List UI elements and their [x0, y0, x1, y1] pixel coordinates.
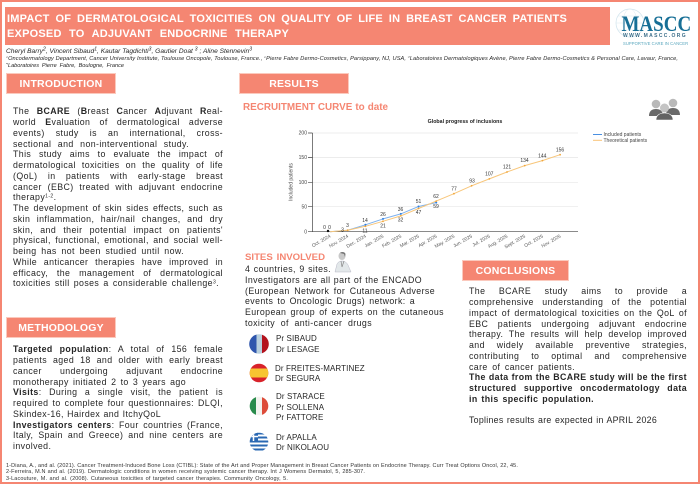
x axis month labels: Sept. 2025 [504, 233, 527, 250]
investigators: Spain [275, 364, 365, 383]
text: methodology: Investigators centers: Four countries (France, [13, 420, 223, 430]
text: introduction: sectional and non-interventional study. [13, 139, 189, 149]
text: methodology: patients aged 18 and older with early breast [13, 355, 223, 365]
data labels: 14 [362, 218, 368, 224]
data labels: 156 [556, 148, 564, 154]
text: methodology: Skindex-16, Hairdex and ItchyQoL [13, 409, 161, 419]
x axis month labels: Jul. 2025 [471, 233, 492, 248]
data labels: 134 [520, 158, 529, 164]
investigators: France: Pr SIBAUD [276, 334, 317, 343]
investigators: Spain: Dr FREITES-MARTINEZ [275, 364, 365, 372]
data labels: 62 [433, 194, 439, 200]
investigators: Italy [276, 392, 325, 422]
text: introduction: efficacy, the management of dermatological [13, 268, 223, 278]
text: conclusions: and widely available preventive strategies, [469, 340, 687, 350]
text: sites description: European group of experts on the cutaneous [245, 307, 444, 317]
text: introduction: This study aims to evaluate the impact of [13, 149, 223, 159]
x axis month labels: Jun. 2025 [452, 233, 474, 249]
heading: introduction: INTRODUCTION [20, 78, 102, 90]
y axis and grid: 50 [301, 204, 307, 210]
text: introduction: cancer (EBC) treated with adjuvant endocrine [13, 182, 223, 192]
references: 3-Lacouture, M. and al. (2008). Cutaneous toxicities of targeted cancer therapies. Community Oncology, 5. [6, 476, 288, 482]
flag: Spain [250, 364, 268, 382]
text: methodology: cancer undergoing adjuvant endocrine [13, 366, 223, 376]
x axis month labels [311, 233, 562, 250]
data labels: 36 [398, 207, 403, 213]
investigators: Greece: Dr APALLA [276, 432, 317, 442]
y axis and grid: 150 [299, 155, 307, 161]
data labels: 0 [323, 225, 326, 231]
text: methodology: monotherapy initiated 2 to 3 years ago [13, 377, 186, 387]
text: methodology: required to complete four questionnaires: DLQI, [13, 398, 223, 408]
text: methodology: Targeted population: A total of 156 female [13, 344, 223, 354]
text: introduction: The development of skin sides effects, such as [13, 203, 223, 213]
x axis month labels: Oct. 2025 [523, 233, 545, 249]
heading: conclusions: CONCLUSIONS [476, 265, 555, 277]
references: 2-Ferreira, M.N and al. (2019). Dermatologic conditions in women receiving systemic cancer therapy. Int J Womens Dermatol, 5, 285-307. [6, 469, 365, 475]
text: introduction: dermatological toxicities on the quality of life [13, 160, 223, 170]
text: conclusions: care of cancer patients. [469, 362, 575, 372]
flag: France [249, 334, 269, 354]
data labels: 11 [362, 228, 368, 234]
logo: MASCC: WWW.MASCC.ORG [623, 33, 687, 39]
text: sites description: events to Oncologic Drugs) network: a [245, 296, 415, 306]
text: conclusions: impact of dermatological toxicities on the QoL of [469, 308, 687, 318]
logo: MASCC: SUPPORTIVE CARE IN CANCER [623, 40, 688, 46]
heading: methodology [6, 317, 116, 338]
text: sites description: (European Network for Cutaneous Adverse [245, 286, 435, 296]
title banner: IMPACT OF DERMATOLOGICAL TOXICITIES ON QUALITY OF LIFE IN BREAST CANCER PATIENTS [7, 12, 567, 24]
data labels: 144 [538, 154, 547, 160]
flag: Italy [250, 397, 268, 415]
text: sites description: Investigators are all part of the ENCADO [245, 275, 422, 285]
text: introduction: skin, and their potential impact on patients' [13, 225, 223, 235]
text: conclusions: therapy. The results will help develop improved [469, 329, 687, 339]
data labels: 21 [380, 224, 386, 230]
references: 1-Diana, A., and al. (2021). Cancer Treatment-Induced Bone Loss (CTIBL): State of the Art and Proper Management in Breast Cancer Patients on Endocrine Therapy. Curr Treat Options Oncol, 22, 45. [6, 462, 518, 468]
data labels: 77 [451, 186, 457, 192]
y axis and grid: 0 [304, 229, 307, 235]
flag: Greece [250, 432, 268, 450]
text: conclusions: The data from the BCARE study will be the first [469, 372, 687, 382]
text: conclusions [469, 286, 687, 425]
heading: methodology: METHODOLOGY [18, 322, 104, 334]
text: conclusions: contributing to optimal and comprehensive [469, 351, 687, 361]
references [6, 462, 518, 482]
text: sites description [245, 264, 444, 328]
chart legend: Theoretical patients [604, 138, 648, 144]
heading: sites involved: SITES INVOLVED [245, 252, 325, 262]
investigators: France [276, 334, 320, 354]
text: introduction: (QoL) in patients with early-stage breast [13, 171, 223, 181]
chart legend [593, 132, 648, 144]
affiliations [6, 56, 678, 68]
text: conclusions: structured supportive oncodermatology data [469, 383, 687, 393]
x axis month labels: Oct. 2024 [311, 233, 332, 249]
data labels: 93 [469, 178, 475, 184]
data labels: 47 [416, 210, 421, 216]
x axis month labels: Dec. 2024 [345, 233, 368, 250]
x axis month labels: Nov. 2024 [328, 233, 350, 249]
heading: recruitment curve: RECRUITMENT CURVE to date [243, 102, 388, 112]
title banner [5, 7, 610, 45]
text: methodology: involved. [13, 441, 51, 451]
y axis and grid: Included patients [288, 163, 294, 201]
investigators: France: Dr LESAGE [276, 345, 320, 354]
text: introduction: world Evaluation of dermatological adverse [13, 117, 223, 127]
data labels: 26 [380, 212, 386, 218]
chart title: Global progress of inclusions [428, 119, 502, 125]
x axis month labels: Jan. 2025 [364, 233, 385, 249]
investigators: Italy: Pr SOLLENA [276, 403, 324, 412]
data labels [323, 148, 564, 234]
icon: doctor [334, 252, 352, 272]
data labels: 121 [503, 164, 511, 170]
text: introduction: therapy1-2. [13, 192, 56, 202]
authors: Cheryl Barry2, Vincent Sibaud1, Kautar Tagdichti3, Gautier Doat 3 ; Aline Stennevin3 [6, 46, 252, 54]
data labels: 51 [416, 199, 421, 205]
data labels: 107 [485, 172, 494, 178]
text: sites description: toxicity of anti-cancer drugs [245, 318, 372, 328]
x axis month labels: Apr. 2025 [417, 233, 438, 249]
series: theoretical patients [327, 154, 561, 232]
x axis month labels: Aug. 2025 [487, 233, 509, 250]
text: introduction: toxicities still poses a considerable challenge3. [13, 278, 219, 288]
text: introduction: While anticancer therapies have improved in [13, 257, 223, 267]
text: introduction: physical, functional, emotional, and social well- [13, 235, 223, 245]
series: included patients [330, 202, 437, 232]
logo: MASCC: MASCC [622, 12, 691, 37]
text: introduction: events) study is an international, cross- [13, 128, 223, 138]
investigators: Italy: Dr STARACE [276, 392, 325, 401]
text: introduction [13, 106, 223, 288]
investigators: Spain: Dr SEGURA [275, 374, 320, 383]
y axis and grid: 100 [299, 180, 307, 186]
text: conclusions: comprehensive understanding of the potential [469, 297, 687, 307]
data labels: 0 [328, 225, 331, 231]
chart legend: Included patients [604, 132, 642, 138]
text: methodology: Italy, Spain and Greece) and nine centers are [13, 430, 223, 440]
data labels: 3 [346, 223, 349, 229]
heading: introduction [6, 73, 116, 94]
investigators: Greece [276, 432, 329, 452]
text: conclusions: The BCARE study aims to provide a [469, 286, 687, 296]
icon: group of people [649, 98, 680, 120]
heading: conclusions [462, 260, 569, 281]
text: sites description: 4 countries, 9 sites. [245, 264, 331, 274]
text: conclusions: Toplines results are expected in APRIL 2026 [469, 415, 657, 425]
text: methodology: Visits: During a single visit, the patient is [13, 387, 223, 397]
text: introduction: The BCARE (Breast Cancer Adjuvant Real- [13, 106, 223, 116]
x axis month labels: Mar. 2025 [399, 233, 421, 249]
heading: results [239, 73, 349, 94]
y axis and grid [288, 131, 578, 235]
title banner: EXPOSED TO ADJUVANT ENDOCRINE THERAPY [7, 28, 289, 40]
text: methodology [13, 344, 223, 451]
data labels: 3 [341, 228, 344, 234]
logo: MASCC [616, 8, 691, 46]
text: introduction: being has not been studied until now. [13, 246, 184, 256]
investigators: Greece: Dr NIKOLAOU [276, 443, 329, 452]
data labels: 32 [398, 218, 403, 224]
text: conclusions: EBC patients undergoing adjuvant endocrine [469, 319, 687, 329]
investigators: Italy: Pr FATTORE [276, 413, 323, 422]
x axis month labels: May. 2025 [434, 233, 456, 250]
y axis and grid: 200 [299, 131, 307, 137]
data labels: 59 [433, 204, 439, 210]
heading: results: RESULTS [269, 78, 319, 90]
text: introduction: skin inflammation, hair/nail changes, and dry [13, 214, 223, 224]
x axis month labels: Nov. 2025 [540, 233, 562, 249]
x axis month labels: Feb. 2025 [381, 233, 403, 250]
text: conclusions: in this specific population. [469, 394, 594, 404]
